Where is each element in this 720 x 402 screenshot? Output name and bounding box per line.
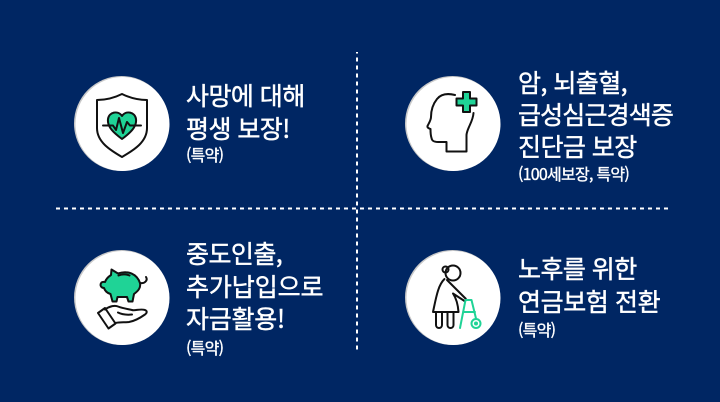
heading line 2: 평생 보장! xyxy=(186,110,290,146)
heading: cancer, stroke: 암, 뇌출혈, xyxy=(518,64,627,100)
icon: elderly woman with walker xyxy=(405,250,500,345)
heading line 3: 자금활용! xyxy=(186,300,285,336)
heading: mid-term withdrawal: 중도인출, xyxy=(186,235,282,271)
heading line 2: 연금보험 전환 xyxy=(518,283,661,319)
panel: withdrawal and additional payment xyxy=(74,235,323,359)
panel: critical illness diagnosis coverage xyxy=(405,64,673,185)
note: rider: (특약) xyxy=(518,317,555,341)
note: rider: (특약) xyxy=(186,335,223,359)
heading line 2: 추가납입으로 xyxy=(186,268,323,304)
panel: pension conversion xyxy=(405,250,661,345)
icon: heart shield xyxy=(74,76,170,171)
icon: head with medical cross xyxy=(405,76,500,171)
heading: for retirement: 노후를 위한 xyxy=(518,250,637,286)
heading: lifetime death coverage: 사망에 대해 xyxy=(186,77,305,113)
panel: lifetime death coverage xyxy=(74,76,305,171)
heading line 2: 급성심근경색증 xyxy=(518,96,673,132)
heading line 3: 진단금 보장 xyxy=(518,128,637,164)
note: rider: (특약) xyxy=(186,142,223,166)
icon: piggy bank over hand xyxy=(74,250,170,345)
note: 100 year coverage rider: (100세보장, 특약) xyxy=(518,161,629,185)
